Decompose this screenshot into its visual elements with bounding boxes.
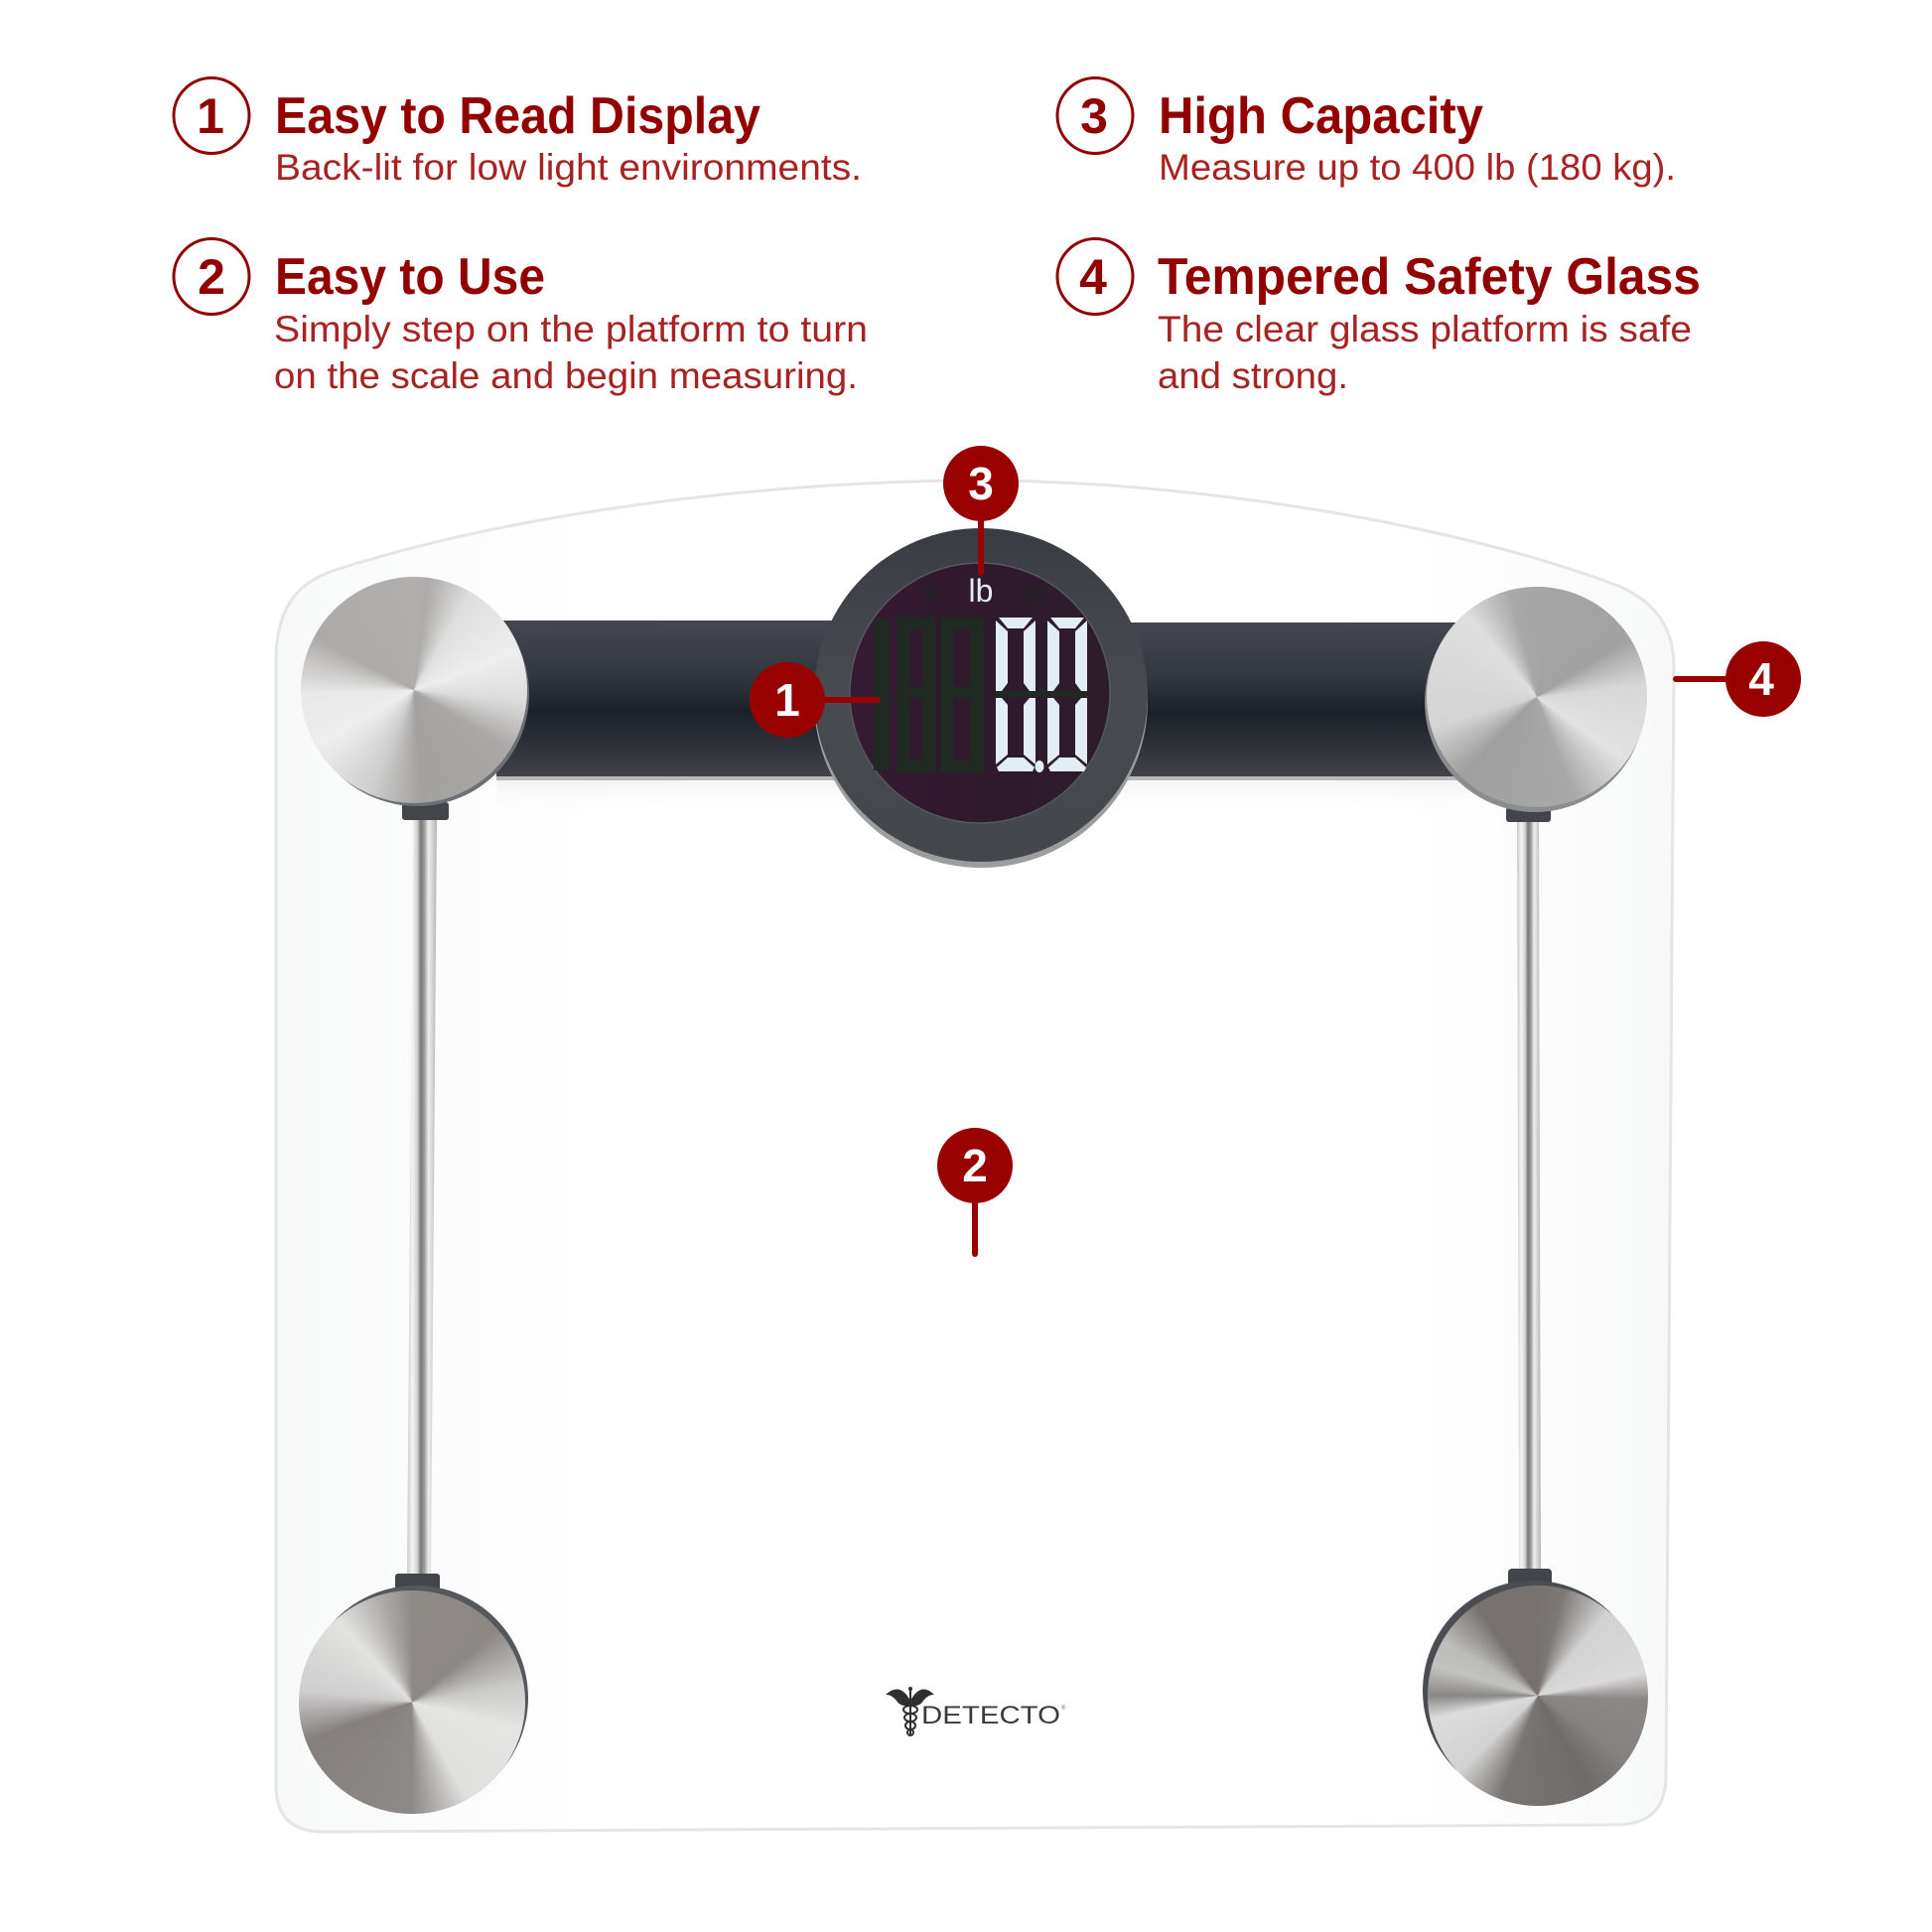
icon: caduceus [886, 1687, 934, 1735]
feature 3: high capacity: Measure up to 400 lb (180 kg). [1159, 147, 1676, 188]
feature 4: tempered safety glass: Tempered Safety Glass [1158, 248, 1701, 306]
feature 4: tempered safety glass: 4 [1079, 249, 1107, 305]
right support rod [1506, 807, 1552, 1587]
glass platform [276, 481, 1674, 1832]
feature 4: tempered safety glass: The clear glass platform is safe [1158, 309, 1692, 349]
feature 4: tempered safety glass: and strong. [1158, 355, 1348, 396]
callout 4: glass edge [1676, 641, 1801, 717]
feature 1: easy to read display: Easy to Read Display [275, 87, 760, 145]
shadow below crossbar [496, 776, 1469, 816]
feature 4: tempered safety glass [1057, 238, 1701, 396]
unit label: lb [969, 573, 993, 609]
feature list [174, 77, 1701, 396]
callout 2: platform [937, 1128, 1013, 1254]
left support rod [395, 802, 449, 1591]
dark bezel [814, 528, 1148, 862]
callout 3: capacity reading: 3 [968, 458, 994, 509]
lcd screen [850, 563, 1110, 823]
feature 2: easy to use: 2 [198, 249, 225, 305]
callout 1: display [750, 662, 878, 738]
feature 3: high capacity [1057, 77, 1676, 188]
brand logo: ® [1061, 1705, 1066, 1712]
display housing [814, 528, 1148, 868]
callout 3: capacity reading [943, 446, 1019, 573]
feature 1: easy to read display: Back-lit for low light environments. [275, 147, 862, 188]
foot disc: bottom left [299, 1590, 525, 1814]
unlit lcd digits [882, 586, 1087, 770]
callout 1: display: 1 [774, 674, 800, 726]
foot disc rims [304, 582, 1645, 1810]
callout 2: platform: 2 [962, 1140, 988, 1191]
feature 3: high capacity: 3 [1080, 88, 1108, 144]
feature 2: easy to use: on the scale and begin measuring. [274, 355, 858, 396]
feature 1: easy to read display [174, 77, 862, 188]
wordmark: DETECTO [921, 1702, 1060, 1729]
lit lcd reading 0.0 [996, 618, 1087, 772]
crossbar [496, 621, 1479, 780]
feature 2: easy to use: Easy to Use [275, 248, 545, 306]
callout 4: glass edge: 4 [1748, 653, 1774, 705]
foot disc: top right [1427, 587, 1647, 807]
foot disc: bottom right [1428, 1586, 1648, 1806]
foot disc: top left [301, 577, 527, 803]
feature 2: easy to use [174, 238, 868, 396]
feature 1: easy to read display: 1 [197, 88, 224, 144]
feature 2: easy to use: Simply step on the platform to turn [274, 309, 868, 349]
feature 3: high capacity: High Capacity [1159, 87, 1483, 145]
brand logo [886, 1687, 1066, 1735]
silver rim of housing [814, 534, 1148, 868]
